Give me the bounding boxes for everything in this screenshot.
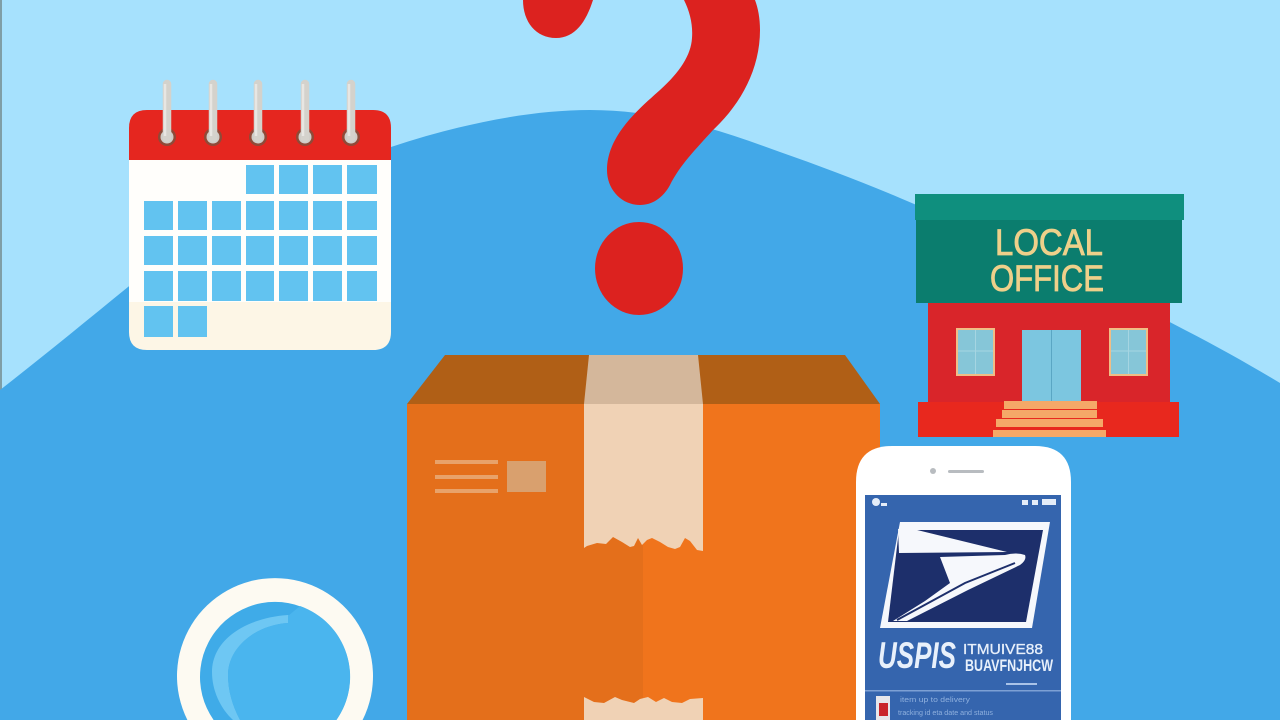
icon: red question mark — [523, 0, 760, 315]
icon: magnifying glass lens — [177, 578, 373, 720]
tracking list item — [876, 696, 993, 720]
base and steps — [918, 401, 1179, 437]
tracking list item: tracking id eta date and status — [898, 710, 993, 717]
sign text — [990, 222, 1104, 299]
smartphone with USPS app — [856, 446, 1071, 720]
app screen — [865, 495, 1061, 720]
packing tape — [584, 404, 703, 720]
windows and door — [957, 329, 1147, 402]
tracking list item: item up to delivery — [900, 697, 971, 704]
calendar binding rings — [158, 84, 360, 146]
shipping label — [435, 460, 546, 493]
sign text: OFFICE — [990, 258, 1104, 299]
package box — [407, 355, 880, 720]
sign text: LOCAL — [995, 222, 1103, 263]
icon: calendar — [129, 84, 391, 350]
USPS app heading: ITMUIVE88 — [963, 641, 1043, 658]
USPS app heading — [878, 635, 1054, 676]
USPS eagle logo — [880, 522, 1050, 628]
status bar — [872, 498, 1056, 506]
USPS app heading: BUAVFNJHCW — [965, 656, 1054, 675]
icon: local office building — [915, 194, 1184, 437]
USPS app heading: USPIS — [878, 635, 956, 676]
calendar date cells — [144, 165, 377, 337]
